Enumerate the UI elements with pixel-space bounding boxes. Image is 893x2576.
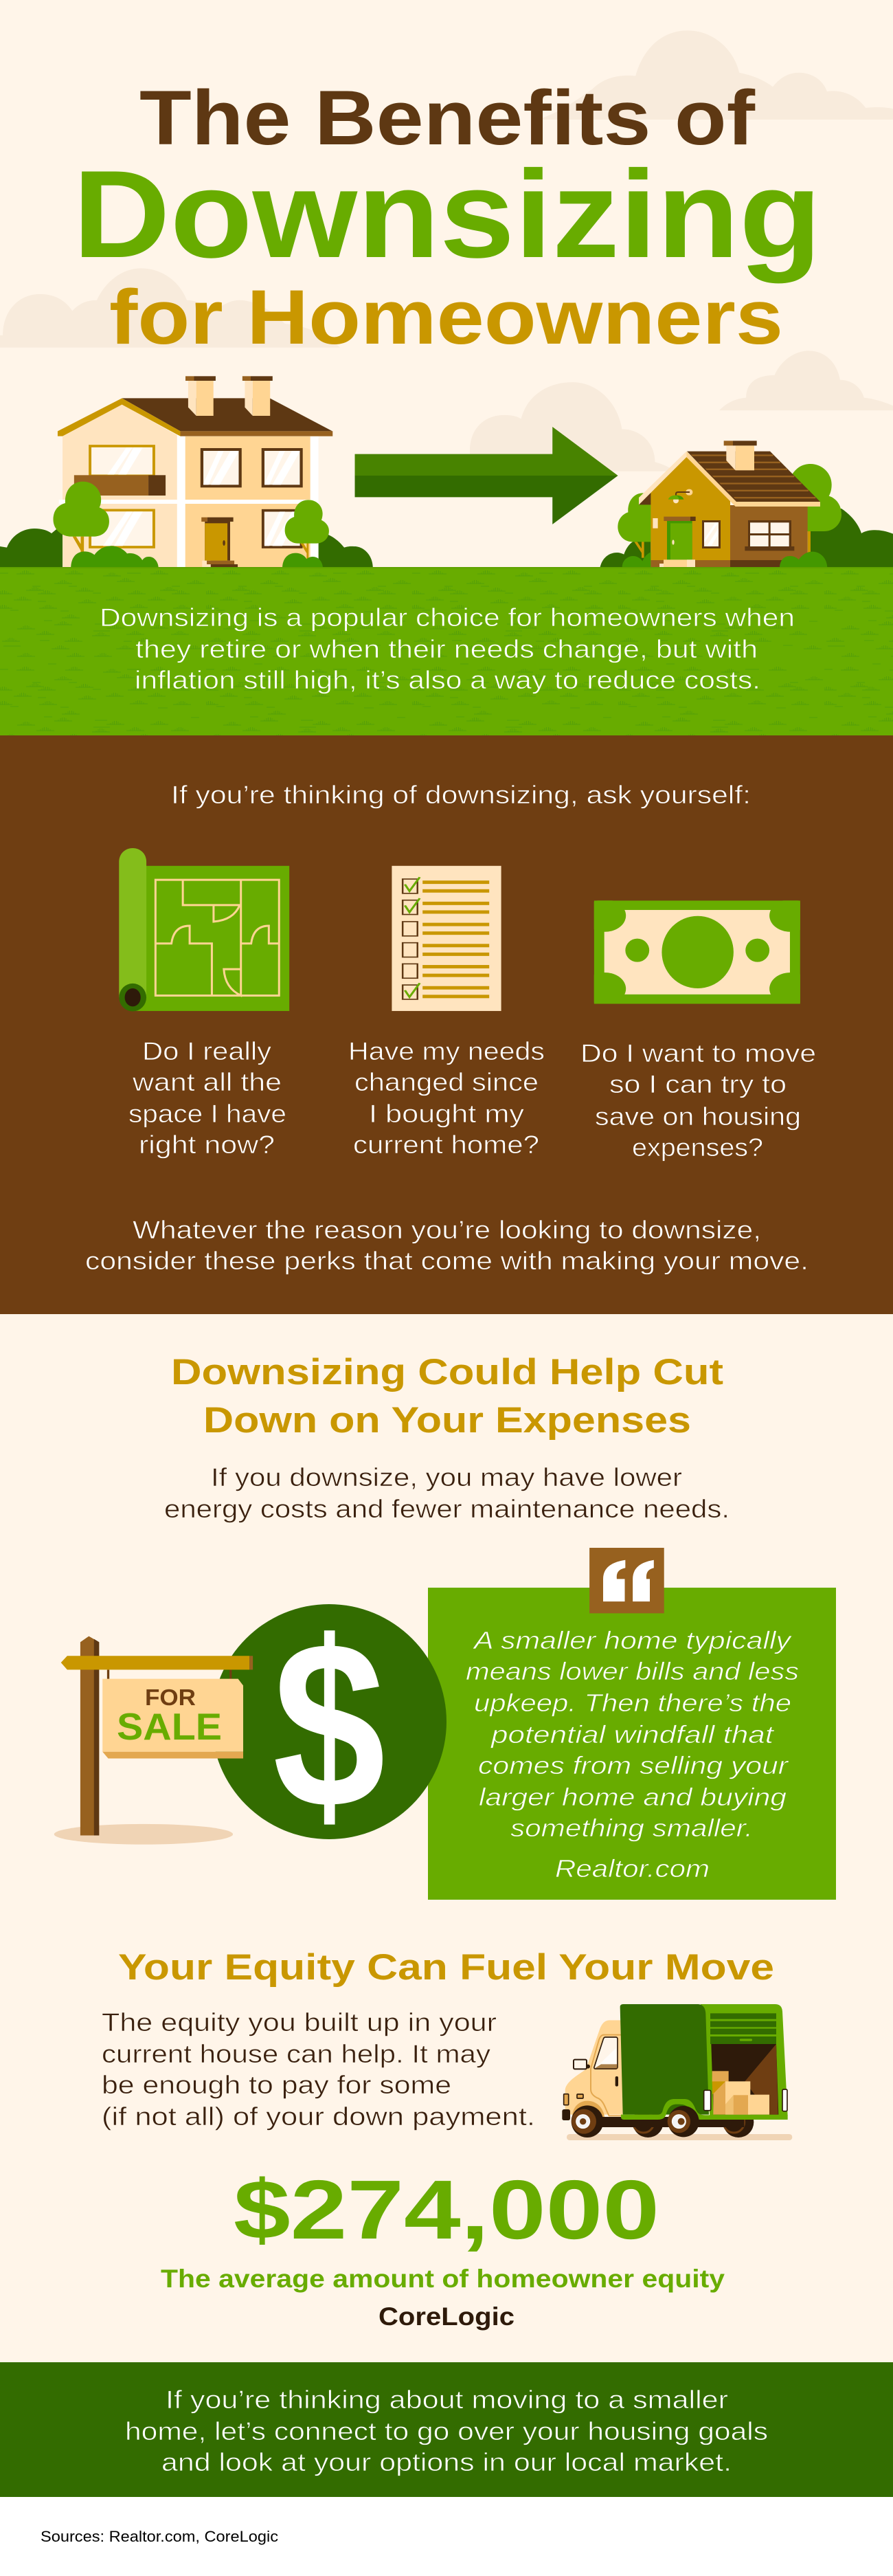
icon: for sale sign bbox=[54, 1636, 253, 1845]
question 2: current home? bbox=[353, 1131, 539, 1159]
question 1: want all the bbox=[132, 1068, 282, 1096]
call to action text: and look at your options in our local market. bbox=[161, 2448, 732, 2476]
intro paragraph bbox=[100, 603, 795, 694]
heading: expenses: Downsizing Could Help Cut bbox=[171, 1352, 723, 1392]
question 2: changed since bbox=[354, 1068, 539, 1096]
expenses intro text: energy costs and fewer maintenance needs. bbox=[164, 1495, 730, 1523]
panel: questions to ask bbox=[0, 735, 893, 1314]
footer white strip bbox=[0, 2497, 893, 2576]
call to action text bbox=[125, 2386, 768, 2476]
panel: call to action bbox=[0, 2362, 893, 2497]
sign text: SALE bbox=[117, 1705, 222, 1748]
quote text: something smaller. bbox=[510, 1814, 753, 1842]
intro paragraph: inflation still high, it’s also a way to reduce costs. bbox=[135, 666, 760, 694]
quote text: comes from selling your bbox=[478, 1751, 789, 1779]
question 2 bbox=[348, 1037, 545, 1159]
arrow bbox=[355, 427, 618, 524]
questions closing text: consider these perks that come with making your move. bbox=[85, 1247, 809, 1275]
heading: expenses bbox=[171, 1352, 723, 1441]
title line 2: Downsizing bbox=[73, 145, 822, 284]
questions closing text bbox=[85, 1216, 809, 1275]
title line 3: for Homeowners bbox=[109, 274, 783, 360]
icon: dollar bill bbox=[594, 900, 800, 1003]
heading: expenses: Down on Your Expenses bbox=[203, 1400, 691, 1441]
quote text: means lower bills and less bbox=[466, 1657, 799, 1685]
sign text bbox=[117, 1685, 222, 1748]
equity paragraph bbox=[102, 2008, 535, 2131]
quote text: potential windfall that bbox=[490, 1720, 775, 1748]
sources: Sources: Realtor.com, CoreLogic bbox=[41, 2528, 278, 2545]
icon: checklist bbox=[392, 866, 501, 1011]
question 3: Do I want to move bbox=[580, 1039, 816, 1067]
quote text: larger home and buying bbox=[479, 1783, 787, 1811]
question 3: save on housing bbox=[595, 1102, 801, 1131]
title line 1: The Benefits of bbox=[139, 75, 756, 161]
equity paragraph: (if not all) of your down payment. bbox=[102, 2102, 535, 2131]
equity paragraph: be enough to pay for some bbox=[102, 2071, 451, 2099]
background clouds bbox=[0, 30, 893, 471]
equity paragraph: current house can help. It may bbox=[102, 2040, 491, 2068]
sign text: FOR bbox=[145, 1685, 196, 1710]
call to action text: If you’re thinking about moving to a smaller bbox=[166, 2386, 728, 2414]
question 3: expenses? bbox=[632, 1133, 763, 1162]
heading: equity: Your Equity Can Fuel Your Move bbox=[118, 1947, 774, 1988]
expenses intro text: If you downsize, you may have lower bbox=[211, 1463, 682, 1491]
questions closing text: Whatever the reason you’re looking to downsize, bbox=[133, 1216, 761, 1244]
question 1: right now? bbox=[139, 1131, 275, 1159]
question 3 bbox=[580, 1039, 816, 1162]
question 1 bbox=[128, 1037, 286, 1159]
panel: quote bbox=[428, 1548, 836, 1900]
big stat: $274,000 bbox=[234, 2163, 659, 2256]
icon: quotation mark badge bbox=[589, 1548, 664, 1613]
icon: blueprint bbox=[119, 848, 289, 1012]
intro paragraph: Downsizing is a popular choice for homeowners when bbox=[100, 603, 795, 632]
call to action text: home, let’s connect to go over your housing goals bbox=[125, 2417, 768, 2445]
question 2: I bought my bbox=[369, 1100, 525, 1128]
equity paragraph: The equity you built up in your bbox=[102, 2008, 497, 2036]
expenses intro text bbox=[164, 1463, 730, 1523]
icon: dollar coin bbox=[212, 1592, 447, 1858]
illustration: moving truck bbox=[562, 2004, 792, 2140]
intro paragraph: they retire or when their needs change, but with bbox=[135, 635, 758, 663]
stat caption: The average amount of homeowner equity bbox=[161, 2265, 725, 2293]
quote text bbox=[466, 1626, 799, 1883]
grass band bbox=[0, 567, 893, 735]
stat source: CoreLogic bbox=[378, 2302, 515, 2331]
illustration: small house bbox=[600, 441, 893, 578]
illustration: large house bbox=[0, 376, 373, 568]
question 1: space I have bbox=[128, 1100, 286, 1128]
icon: dollar coin: $ bbox=[273, 1592, 385, 1858]
question 2: Have my needs bbox=[348, 1037, 545, 1065]
quote text: A smaller home typically bbox=[473, 1626, 792, 1654]
question 1: Do I really bbox=[142, 1037, 272, 1065]
quote text: Realtor.com bbox=[555, 1854, 710, 1883]
quote text: upkeep. Then there’s the bbox=[474, 1689, 791, 1717]
question 3: so I can try to bbox=[609, 1070, 787, 1098]
title bbox=[73, 75, 822, 360]
questions heading: If you’re thinking of downsizing, ask yourself: bbox=[171, 781, 751, 809]
